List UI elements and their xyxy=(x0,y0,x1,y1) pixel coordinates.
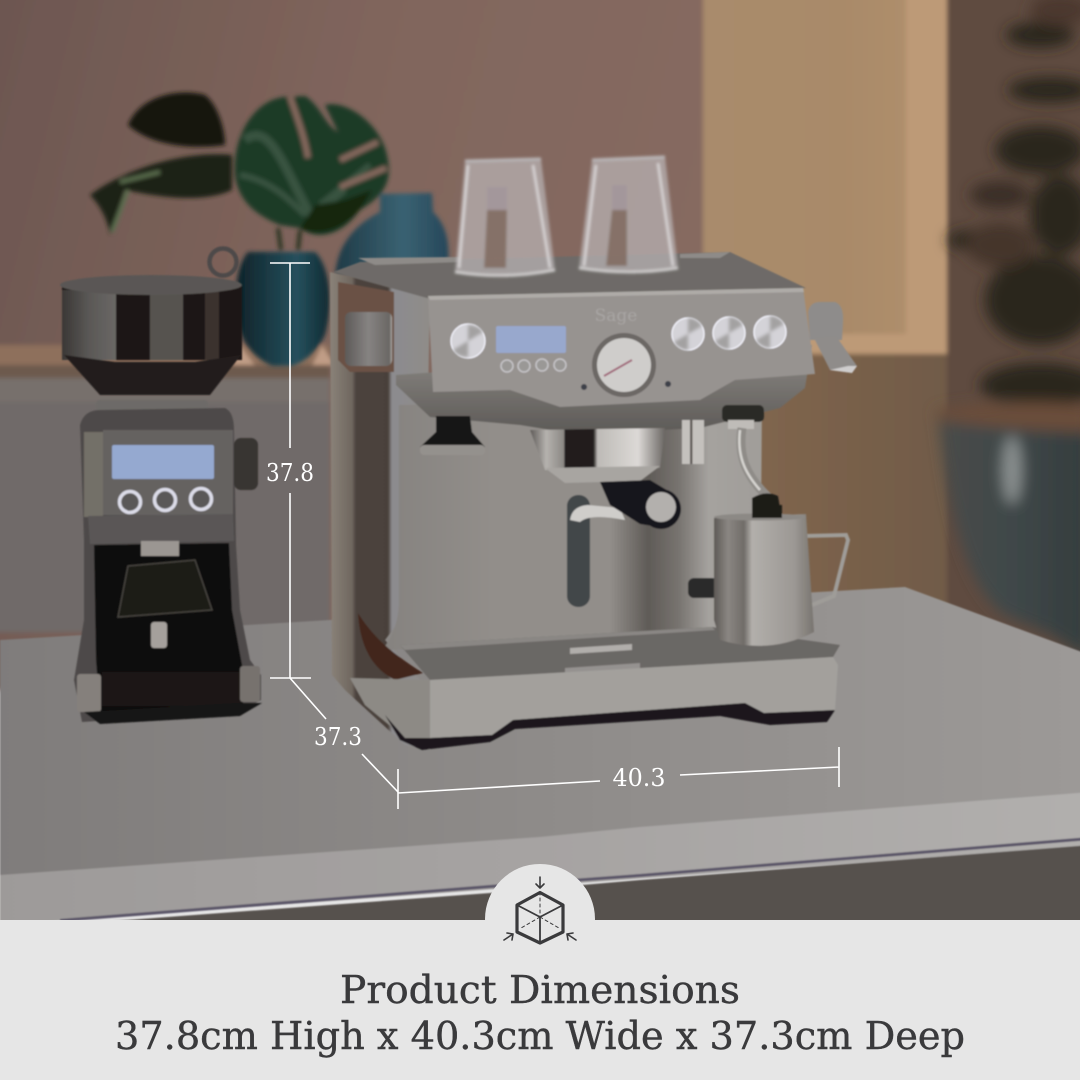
drip tray xyxy=(400,627,840,680)
base feet xyxy=(385,703,835,750)
vase: rear xyxy=(335,193,449,275)
left knob xyxy=(345,312,392,366)
icon: cube with inward arrows xyxy=(504,877,576,943)
depth dimension 37.3 xyxy=(290,678,398,792)
plants and vases xyxy=(90,93,449,366)
grinder body xyxy=(74,408,261,722)
grinder control panel xyxy=(103,430,233,515)
label 40.3: 40.3 xyxy=(612,764,666,792)
espresso machine xyxy=(330,157,857,750)
shelf glow beside vase xyxy=(232,345,335,365)
plant: dark leaves xyxy=(90,93,232,235)
tamper xyxy=(420,416,485,455)
icon tab xyxy=(485,864,595,974)
grinder left trim xyxy=(84,432,103,517)
label 37.8: 37.8 xyxy=(266,459,314,487)
grinder lower band xyxy=(88,514,234,544)
background: room xyxy=(0,0,1080,690)
grinder buttons xyxy=(120,488,212,512)
heading: Product Dimensions xyxy=(340,968,740,1012)
portafilter cradle xyxy=(118,560,212,617)
control panel xyxy=(428,288,815,407)
width dimension 40.3 xyxy=(398,747,839,809)
milk jug xyxy=(714,505,848,646)
shelf behind grinder xyxy=(0,345,330,367)
label 37.3: 37.3 xyxy=(314,723,362,751)
machine left side xyxy=(330,272,430,750)
machine base xyxy=(430,657,838,738)
steam lever xyxy=(808,302,857,373)
countertop xyxy=(0,587,1080,925)
coffee grinder xyxy=(60,248,262,724)
pressure gauge xyxy=(592,333,656,397)
brand mark: Sage xyxy=(595,306,637,326)
hopper collar xyxy=(96,400,208,413)
machine corner reflection xyxy=(358,613,423,680)
grinder side knob xyxy=(234,438,258,490)
grinder bay xyxy=(94,543,243,712)
group head xyxy=(530,428,665,483)
plant: monstera leaf xyxy=(235,96,389,250)
under counter xyxy=(60,845,1080,925)
grinder spout xyxy=(141,541,179,556)
hot water outlet xyxy=(682,420,704,464)
lower left corner xyxy=(350,678,430,738)
grinder tray xyxy=(102,672,242,706)
cradle pin xyxy=(151,622,167,648)
steam wand xyxy=(722,405,782,520)
vase: front xyxy=(236,252,329,366)
machine front face xyxy=(382,400,762,650)
right dials xyxy=(672,316,786,350)
pump button xyxy=(688,578,718,598)
height dimension 37.8 xyxy=(266,263,314,678)
counter front edge xyxy=(0,792,1080,925)
machine top xyxy=(333,252,806,298)
grinder lid xyxy=(60,275,242,295)
upturned glass: left xyxy=(455,159,555,276)
lower fascia band xyxy=(396,345,812,434)
LCD display xyxy=(496,326,566,353)
grinder metal feet xyxy=(77,674,101,712)
drip slot xyxy=(567,495,590,607)
grinder screen xyxy=(112,445,214,479)
left dial xyxy=(451,324,485,358)
right plant and planter xyxy=(935,0,1080,660)
dimensions text: 37.8cm High x 40.3cm Wide x 37.3cm Deep xyxy=(115,1014,965,1058)
upturned glass: right xyxy=(579,157,678,272)
bottom caption panel xyxy=(0,920,1080,1080)
indicator lights xyxy=(581,381,671,390)
small buttons xyxy=(501,359,566,372)
bean hopper xyxy=(62,285,242,395)
grinder lid loop xyxy=(210,248,236,276)
machine upper side recess xyxy=(338,282,394,372)
portafilter xyxy=(570,480,681,529)
